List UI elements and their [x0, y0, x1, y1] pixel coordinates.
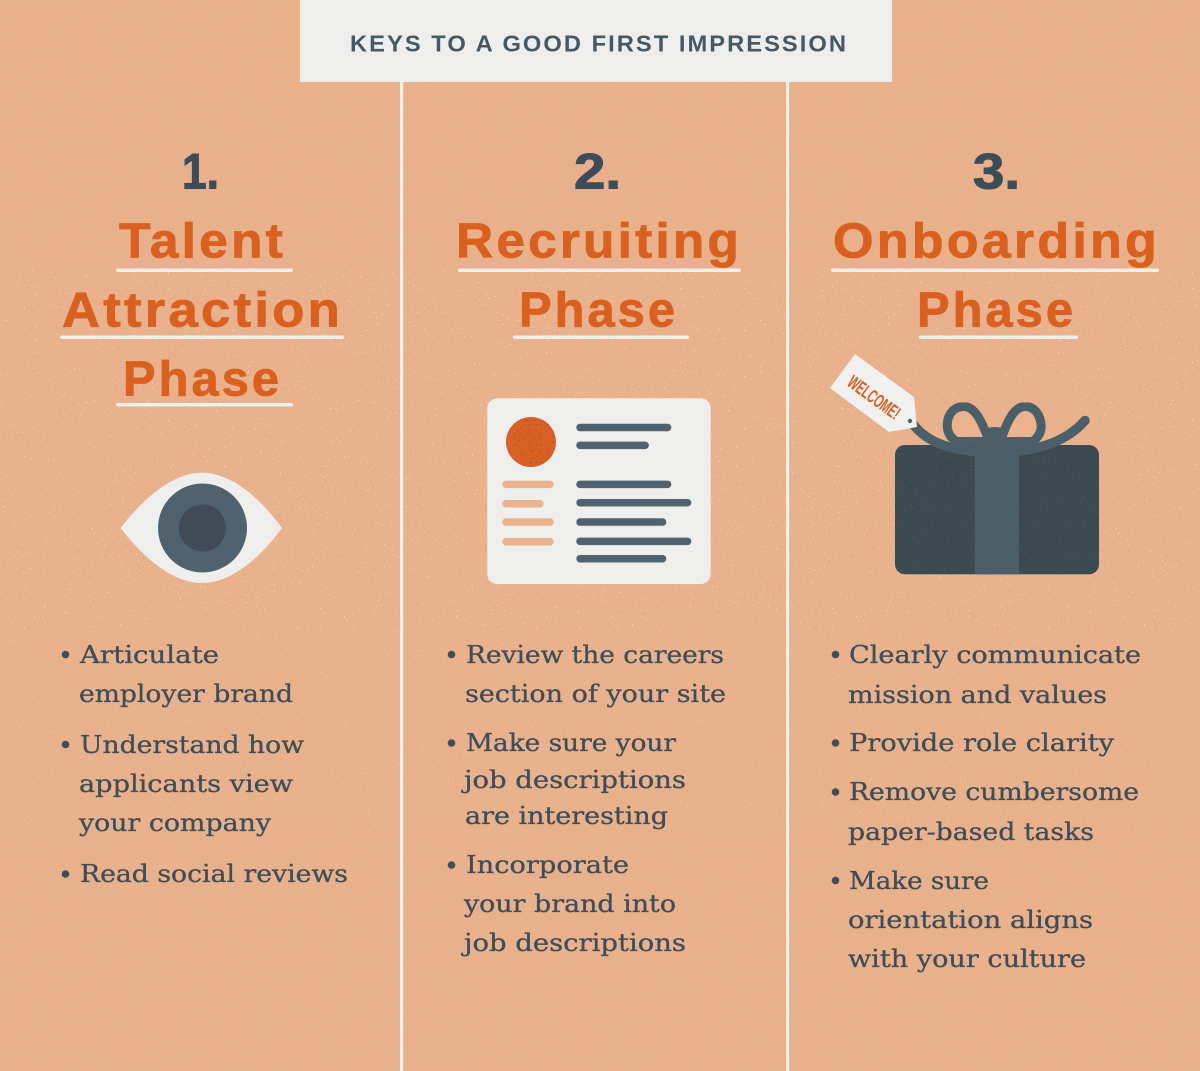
welcome tag: [830, 354, 917, 432]
number 3: 3.: [973, 144, 1020, 200]
heading: onboarding phase: [831, 214, 1160, 339]
heading: recruiting phase: Recruiting: [456, 214, 742, 268]
icon: eye: [120, 473, 282, 583]
panel: recruiting phase: [448, 144, 742, 957]
heading: recruiting phase: [456, 214, 742, 339]
heading: onboarding phase: Onboarding: [833, 214, 1160, 268]
bullet list: recruiting: job descriptions: [461, 766, 686, 794]
icon: gift box with welcome tag: [830, 354, 1099, 574]
title banner: [300, 0, 892, 82]
welcome tag: WELCOME!: [843, 372, 904, 424]
icon: resume card: [487, 398, 711, 584]
heading: talent attraction phase: Talent: [119, 214, 286, 268]
bullet list: recruiting: your brand into: [463, 890, 676, 918]
bullet list: talent attraction: Read social reviews: [80, 860, 348, 888]
bullet list: recruiting: [448, 641, 726, 957]
bullet list: onboarding: Clearly communicate: [849, 641, 1141, 669]
bullet list: onboarding: with your culture: [848, 945, 1086, 973]
bullet list: talent attraction: employer brand: [79, 680, 293, 708]
panel: talent attraction phase: [60, 144, 348, 888]
bullet list: recruiting: section of your site: [465, 680, 726, 708]
number 2: 2.: [574, 144, 621, 200]
bullet list: recruiting: Make sure your: [466, 729, 677, 757]
bullet list: recruiting: Review the careers: [466, 641, 724, 669]
bullet list: onboarding: [832, 641, 1141, 973]
bullet list: onboarding: Remove cumbersome: [849, 778, 1139, 806]
bullet list: recruiting: are interesting: [465, 802, 668, 830]
bullet list: onboarding: Provide role clarity: [849, 729, 1114, 757]
panel: onboarding phase: [830, 144, 1160, 973]
title: KEYS TO A GOOD FIRST IMPRESSION: [350, 30, 848, 56]
bullet list: onboarding: orientation aligns: [848, 906, 1093, 934]
bullet list: onboarding: paper-based tasks: [848, 818, 1094, 846]
heading: talent attraction phase: [60, 214, 344, 406]
bullet list: recruiting: Incorporate: [466, 851, 629, 879]
heading: talent attraction phase: Attraction: [62, 284, 343, 338]
bullet list: talent attraction: applicants view: [79, 770, 294, 798]
heading: recruiting phase: Phase: [519, 284, 678, 338]
bullet list: onboarding: mission and values: [848, 681, 1107, 709]
bullet list: onboarding: Make sure: [849, 867, 989, 895]
heading: onboarding phase: Phase: [917, 284, 1076, 338]
bullet list: talent attraction: Articulate: [79, 641, 219, 669]
bullet list: recruiting: job descriptions: [461, 929, 686, 957]
heading: talent attraction phase: Phase: [123, 352, 282, 406]
bullet list: talent attraction: Understand how: [80, 731, 305, 759]
bullet list: talent attraction: your company: [78, 809, 271, 837]
number 1: 1.: [182, 144, 219, 200]
bullet list: talent attraction: [62, 641, 348, 888]
